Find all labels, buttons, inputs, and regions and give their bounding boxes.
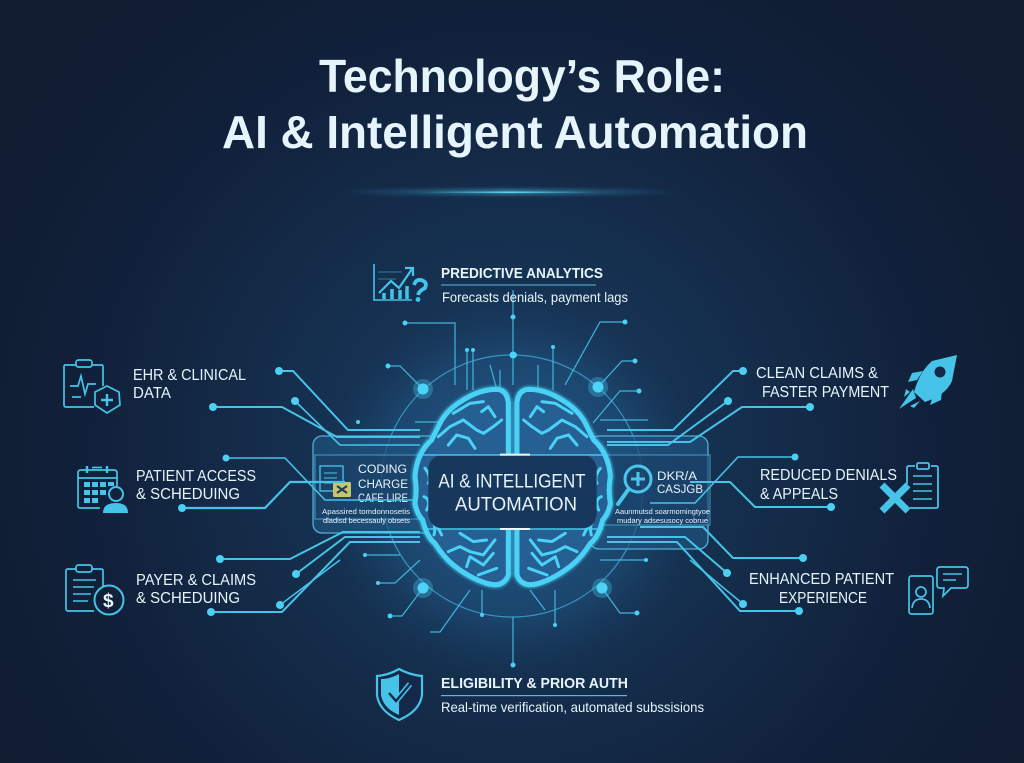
central halo bbox=[312, 288, 712, 688]
title: Technology’s Role: bbox=[319, 50, 725, 102]
icon: clipboard with cross bbox=[882, 463, 938, 511]
side panel: denial case bbox=[590, 436, 710, 549]
icon: calendar with person bbox=[78, 466, 128, 513]
orbit ring bbox=[381, 355, 643, 617]
icon: rocket bbox=[899, 355, 957, 409]
circuit traces: right outputs bbox=[607, 367, 835, 615]
icon: clipboard with pulse and badge bbox=[64, 360, 120, 413]
label: EHR & CLINICAL bbox=[133, 367, 246, 384]
label: & APPEALS bbox=[760, 486, 838, 503]
label: DATA bbox=[133, 385, 171, 402]
panel text: coding: CODING bbox=[358, 464, 407, 476]
label bbox=[749, 571, 894, 607]
heading and description: ELIGIBILITY & PRIOR AUTH bbox=[441, 675, 628, 692]
brain bbox=[415, 389, 610, 585]
brain folds left bbox=[424, 402, 502, 575]
panel text: denial bbox=[615, 471, 710, 525]
input: EHR and clinical data bbox=[64, 360, 246, 413]
side panel: coding and charge capture bbox=[313, 436, 438, 533]
label bbox=[760, 467, 897, 503]
icon: clipboard with dollar coin: $ bbox=[103, 591, 114, 612]
label: PATIENT ACCESS bbox=[136, 468, 256, 485]
panel text: denial: Aaunmutsd soarmomingtyoe bbox=[615, 507, 710, 516]
icon: document with ticket bbox=[320, 466, 351, 497]
input: payer and claims bbox=[66, 565, 256, 614]
icon: shield with check bbox=[377, 669, 422, 720]
icon: magnifier with plus bbox=[618, 466, 651, 504]
panel text: coding bbox=[322, 464, 410, 525]
label: ENHANCED PATIENT bbox=[749, 571, 894, 588]
brain glow bbox=[415, 389, 610, 585]
panel text: coding: CHARGE bbox=[358, 479, 408, 491]
title: AI & Intelligent Automation bbox=[222, 106, 808, 158]
label: PAYER & CLAIMS bbox=[136, 572, 256, 589]
label: & SCHEDUING bbox=[136, 486, 240, 503]
input: predictive analytics bbox=[374, 264, 628, 305]
output: reduced denials and appeals bbox=[760, 463, 938, 511]
central banner bbox=[423, 454, 603, 530]
central banner: AUTOMATION bbox=[455, 495, 577, 516]
icon: trend chart with question mark bbox=[374, 264, 426, 302]
icon: clipboard with dollar coin bbox=[66, 565, 124, 614]
brain folds right bbox=[524, 402, 601, 575]
panel text: coding: dladisd becessauly obsets bbox=[323, 516, 410, 525]
panel text: denial: mudary adsesusocy cobrue bbox=[617, 516, 708, 525]
circuit traces: left inputs bbox=[178, 367, 420, 616]
brain outline bbox=[415, 389, 610, 585]
icon: phone and chat bubble bbox=[909, 567, 968, 614]
input: patient access and scheduling bbox=[78, 466, 256, 513]
panel text: coding: Apassired tomdonnosetis bbox=[322, 507, 410, 516]
title bbox=[222, 50, 808, 158]
panel text: denial: DKR/A bbox=[657, 471, 697, 483]
orbit nodes bbox=[413, 352, 612, 598]
heading and description bbox=[441, 265, 628, 305]
circuit traces: top and bottom branches bbox=[356, 290, 648, 668]
label bbox=[136, 468, 256, 503]
title divider glow bbox=[340, 189, 680, 195]
output: enhanced patient experience bbox=[749, 567, 968, 614]
label: & SCHEDUING bbox=[136, 590, 240, 607]
central banner: AI & INTELLIGENT bbox=[438, 471, 586, 492]
output: clean claims and faster payment bbox=[756, 355, 957, 409]
label: REDUCED DENIALS bbox=[760, 467, 897, 484]
label bbox=[136, 572, 256, 607]
label bbox=[133, 367, 246, 402]
heading and description: Real-time verification, automated subssisions bbox=[441, 699, 704, 715]
heading and description bbox=[441, 675, 704, 715]
panel text: coding: CAFE LIRE bbox=[358, 493, 408, 505]
heading and description: PREDICTIVE ANALYTICS bbox=[441, 265, 603, 282]
label bbox=[756, 365, 889, 401]
label: FASTER PAYMENT bbox=[762, 384, 889, 401]
heading and description: Forecasts denials, payment lags bbox=[442, 289, 628, 305]
input: eligibility and prior auth bbox=[377, 669, 704, 720]
label: CLEAN CLAIMS & bbox=[756, 365, 878, 382]
label: EXPERIENCE bbox=[779, 590, 867, 607]
panel text: denial: CASJGB bbox=[657, 484, 703, 496]
